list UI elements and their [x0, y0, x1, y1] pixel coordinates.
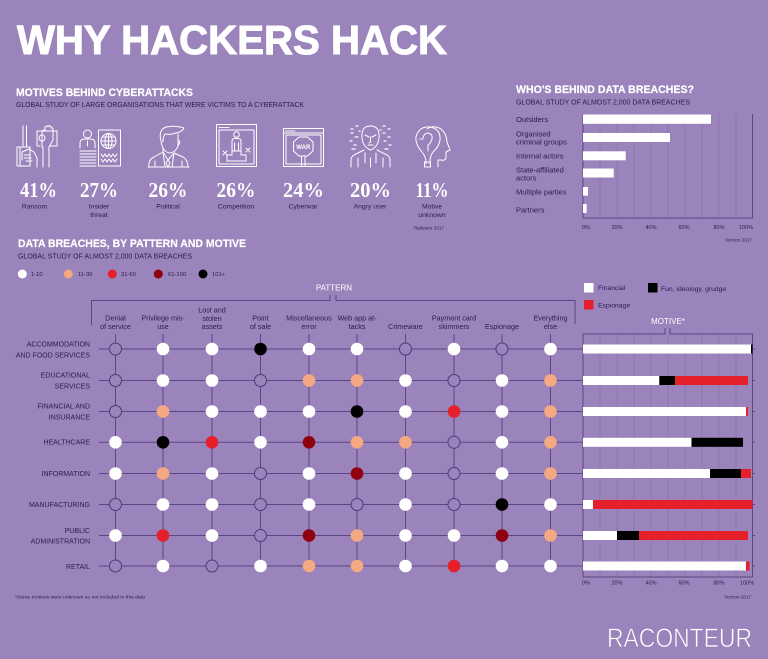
- dot matrix row: manufacturing: [110, 498, 557, 511]
- icon: cyberwar: [284, 128, 324, 166]
- row labels: PUBLIC: [65, 528, 90, 535]
- panel: motives behind cyberattacks: [16, 87, 450, 230]
- stat: political: 26%: [148, 178, 188, 202]
- legend: motive colours: Espionage: [598, 302, 630, 310]
- column headers: tacks: [349, 322, 366, 331]
- column headers: Lost and: [198, 306, 226, 314]
- dot matrix row: educational: [110, 374, 557, 387]
- motive axis labels: 100%: [740, 580, 754, 586]
- row labels: ACCOMMODATION: [27, 342, 90, 348]
- legend: dot counts: [18, 270, 226, 278]
- heading: who's behind: WHO'S BEHIND DATA BREACHES?: [516, 84, 694, 96]
- subheading: data breaches: GLOBAL STUDY OF ALMOST 2,000 DATA BREACHES: [18, 254, 192, 260]
- column headers: of sale: [250, 322, 271, 331]
- column headers: assets: [202, 322, 223, 331]
- dot matrix row: healthcare: [109, 436, 557, 449]
- column headers: else: [544, 322, 557, 331]
- bar chart: actors: [516, 114, 753, 231]
- source: verizon bottom: Verizon 2017: [724, 594, 751, 600]
- stat: competition: [216, 178, 256, 210]
- row labels: SERVICES: [55, 384, 90, 390]
- bar chart: actors: 20%: [611, 225, 623, 231]
- stat: motive unknown: [416, 178, 448, 219]
- panel: who's behind data breaches: [516, 84, 753, 242]
- column headers: [100, 306, 567, 331]
- column headers: Privilege mis-: [141, 314, 185, 322]
- bar chart: actors: Organised: [516, 130, 551, 138]
- column headers: use: [157, 322, 169, 331]
- icon: motive unknown: [416, 127, 450, 167]
- bar chart: actors: State-affiliated: [516, 166, 564, 174]
- icon: cyberwar: WAR: [296, 144, 311, 151]
- bar chart: actors: 0%: [582, 225, 590, 231]
- subheading: motives: GLOBAL STUDY OF LARGE ORGANISATIONS THAT WERE VICTIMS TO A CYBERATTACK: [16, 102, 304, 109]
- row labels: FINANCIAL AND: [37, 404, 90, 410]
- title: WHY HACKERS HACK: [17, 17, 447, 63]
- bar chart: actors: criminal groups: [516, 138, 567, 146]
- column headers: Denial: [105, 314, 126, 322]
- column headers: Espionage: [485, 322, 519, 331]
- row labels: EDUCATIONAL: [41, 372, 90, 380]
- dot matrix grid lines: [99, 334, 755, 566]
- legend: motive colours: Fun, ideology, grudge: [661, 286, 726, 293]
- dot matrix row: accommodation: [110, 343, 557, 355]
- row labels: INSURANCE: [49, 414, 90, 422]
- row labels: ADMINISTRATION: [31, 538, 90, 546]
- column headers: skimmers: [439, 322, 470, 331]
- legend: motive colours: Financial: [598, 285, 626, 292]
- stat: motive unknown: Motive: [422, 204, 442, 210]
- icon: ransom: [17, 126, 57, 167]
- bar chart: actors: 80%: [713, 225, 725, 231]
- column headers: stolen: [202, 314, 222, 323]
- icon: insider threat: [80, 130, 120, 166]
- subheading: who's behind: GLOBAL STUDY OF ALMOST 2,000 DATA BREACHES: [516, 100, 690, 106]
- icon: political: [148, 126, 189, 167]
- dot matrix row: financial: [110, 405, 557, 418]
- column headers: of service: [100, 322, 131, 331]
- row labels: MANUFACTURING: [29, 502, 90, 509]
- bar chart: actors: Outsiders: [516, 115, 548, 124]
- motive axis labels: [582, 580, 754, 586]
- legend: dot counts: 61-100: [168, 272, 186, 278]
- icon: angry user: [350, 126, 391, 167]
- motive stacked bars: [583, 344, 752, 570]
- bar chart: actors: 40%: [645, 225, 657, 231]
- stat: insider threat: [80, 178, 118, 219]
- dot matrix row: public administration: [109, 529, 557, 542]
- legend: dot counts: 11-30: [78, 272, 92, 278]
- pattern bracket and label: PATTERN: [316, 284, 352, 292]
- bar chart: actors: 60%: [678, 225, 690, 231]
- stat: competition: Competition: [218, 204, 254, 210]
- stat: insider threat: Insider: [89, 204, 110, 210]
- column headers: Crimeware: [388, 322, 423, 331]
- stat: cyberwar: 24%: [283, 178, 324, 202]
- row labels: [16, 342, 90, 571]
- column headers: Payment card: [432, 314, 476, 322]
- bar chart: actors: 100%: [739, 225, 753, 231]
- pattern bracket and label: [92, 284, 575, 325]
- row labels: RETAIL: [66, 564, 90, 571]
- motive axis labels: 80%: [713, 580, 725, 586]
- stat: angry user: Angry user: [354, 204, 387, 210]
- bar chart: actors: actors: [516, 174, 537, 182]
- bar chart: actors: Internal actors: [516, 152, 564, 160]
- column headers: Everything: [534, 314, 567, 322]
- stat: angry user: 20%: [350, 178, 391, 202]
- motive axis labels: 40%: [645, 580, 657, 586]
- motive axis labels: 20%: [611, 580, 623, 586]
- stat: insider threat: 27%: [80, 178, 118, 202]
- heading: motives: MOTIVES BEHIND CYBERATTACKS: [16, 87, 193, 99]
- icon: competition: [216, 124, 256, 166]
- legend: dot counts: 101+: [212, 272, 226, 278]
- motive axis labels: 0%: [582, 580, 590, 586]
- row labels: AND FOOD SERVICES: [16, 352, 90, 360]
- source: motives: Radware 2017: [414, 226, 444, 230]
- bar chart: actors: Partners: [516, 206, 545, 214]
- row labels: HEALTHCARE: [43, 440, 90, 447]
- dot matrix row: information: [109, 467, 557, 480]
- footnote: *Some motives were unknown so not included in this data: [15, 594, 145, 600]
- stat: ransom: Ransom: [22, 204, 47, 210]
- stat: motive unknown: unknown: [418, 212, 446, 219]
- dot matrix row: retail: [110, 560, 557, 572]
- stat: insider threat: threat: [90, 212, 108, 219]
- bar chart: actors: Multiple parties: [516, 188, 567, 196]
- stat: political: Political: [156, 204, 180, 210]
- row labels: INFORMATION: [42, 471, 90, 478]
- source: verizon top: Verizon 2017: [725, 238, 752, 242]
- heading: data breaches: DATA BREACHES, BY PATTERN AND MOTIVE: [18, 238, 246, 250]
- column headers: error: [301, 322, 317, 331]
- stat: ransom: 41%: [20, 178, 57, 202]
- column headers: Point: [252, 314, 269, 322]
- stat: cyberwar: Cyberwar: [288, 204, 318, 210]
- motive chart gridlines and axis: MOTIVE*: [651, 317, 685, 326]
- column headers: Web app at-: [337, 314, 377, 322]
- legend: motive colours: [584, 283, 726, 310]
- motive axis labels: 60%: [678, 580, 690, 586]
- stat: competition: 26%: [216, 178, 256, 202]
- stat: political: [148, 178, 188, 210]
- column headers: Miscellaneous: [286, 314, 332, 322]
- legend: dot counts: 1-10: [31, 272, 43, 278]
- legend: dot counts: 31-60: [121, 272, 136, 278]
- motive chart gridlines and axis: [583, 317, 752, 577]
- panel: data breaches by pattern and motive: [15, 238, 755, 600]
- stat: ransom: [20, 178, 57, 210]
- stat: motive unknown: 11%: [416, 178, 448, 202]
